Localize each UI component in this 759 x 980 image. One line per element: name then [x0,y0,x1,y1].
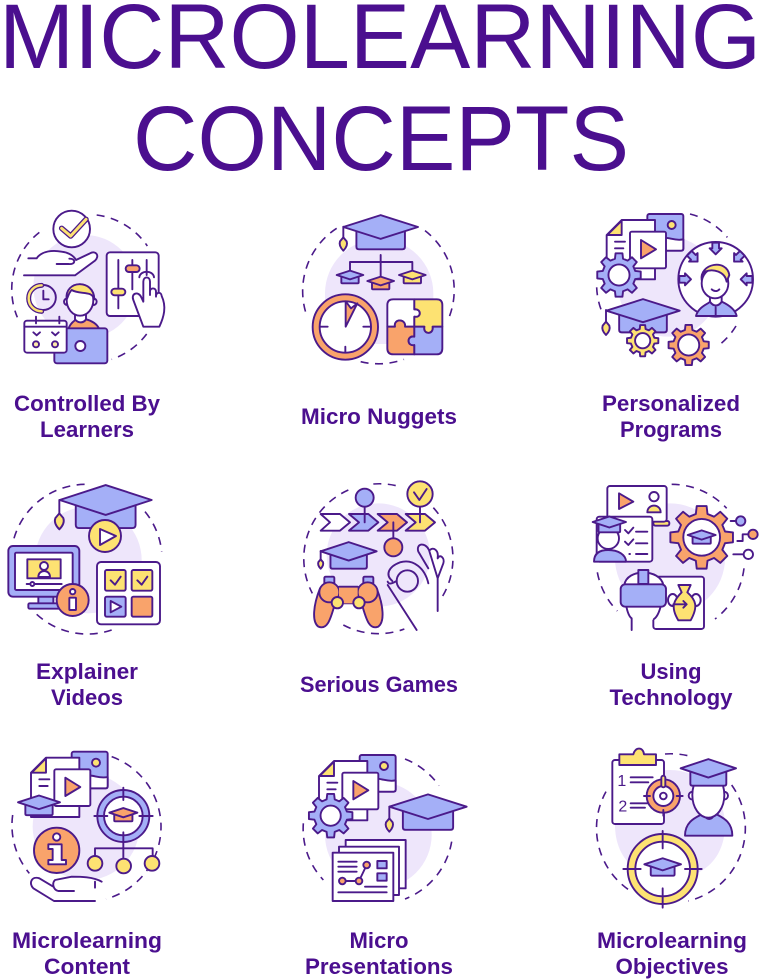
label: micro presentations: Presentations [305,954,453,979]
title [0,0,759,190]
label: microlearning objectives: Microlearning [597,928,747,953]
label: micro presentations: Micro [350,928,408,953]
icon: microlearning content [12,752,161,901]
clipboard numbers: 1 [617,773,626,790]
label: using technology: Technology [610,685,733,710]
label: explainer videos: Explainer [36,659,138,684]
icon: micro nuggets [303,215,454,364]
label: microlearning objectives: Objectives [616,954,728,979]
label: micro nuggets: Micro Nuggets [301,404,457,429]
clipboard numbers: 2 [618,799,627,816]
title: CONCEPTS [133,88,629,190]
icon: using technology [593,484,758,630]
label: serious games: Serious Games [300,672,458,697]
icon: serious games [304,481,453,634]
icon: micro presentations [303,755,467,901]
label: personalized programs: Programs [620,417,722,442]
icon: controlled by learners [12,211,164,363]
icon: microlearning objectives [597,749,745,908]
icon: explainer videos [8,484,162,634]
label: controlled by learners: Learners [40,417,134,442]
icon: personalized programs [597,214,753,365]
label: explainer videos: Videos [51,685,123,710]
label: personalized programs: Personalized [602,391,740,416]
label: microlearning content: Content [44,954,131,979]
label: controlled by learners: Controlled By [14,391,161,416]
label: using technology: Using [640,659,702,684]
label: microlearning content: Microlearning [12,928,162,953]
clipboard numbers [617,773,627,816]
